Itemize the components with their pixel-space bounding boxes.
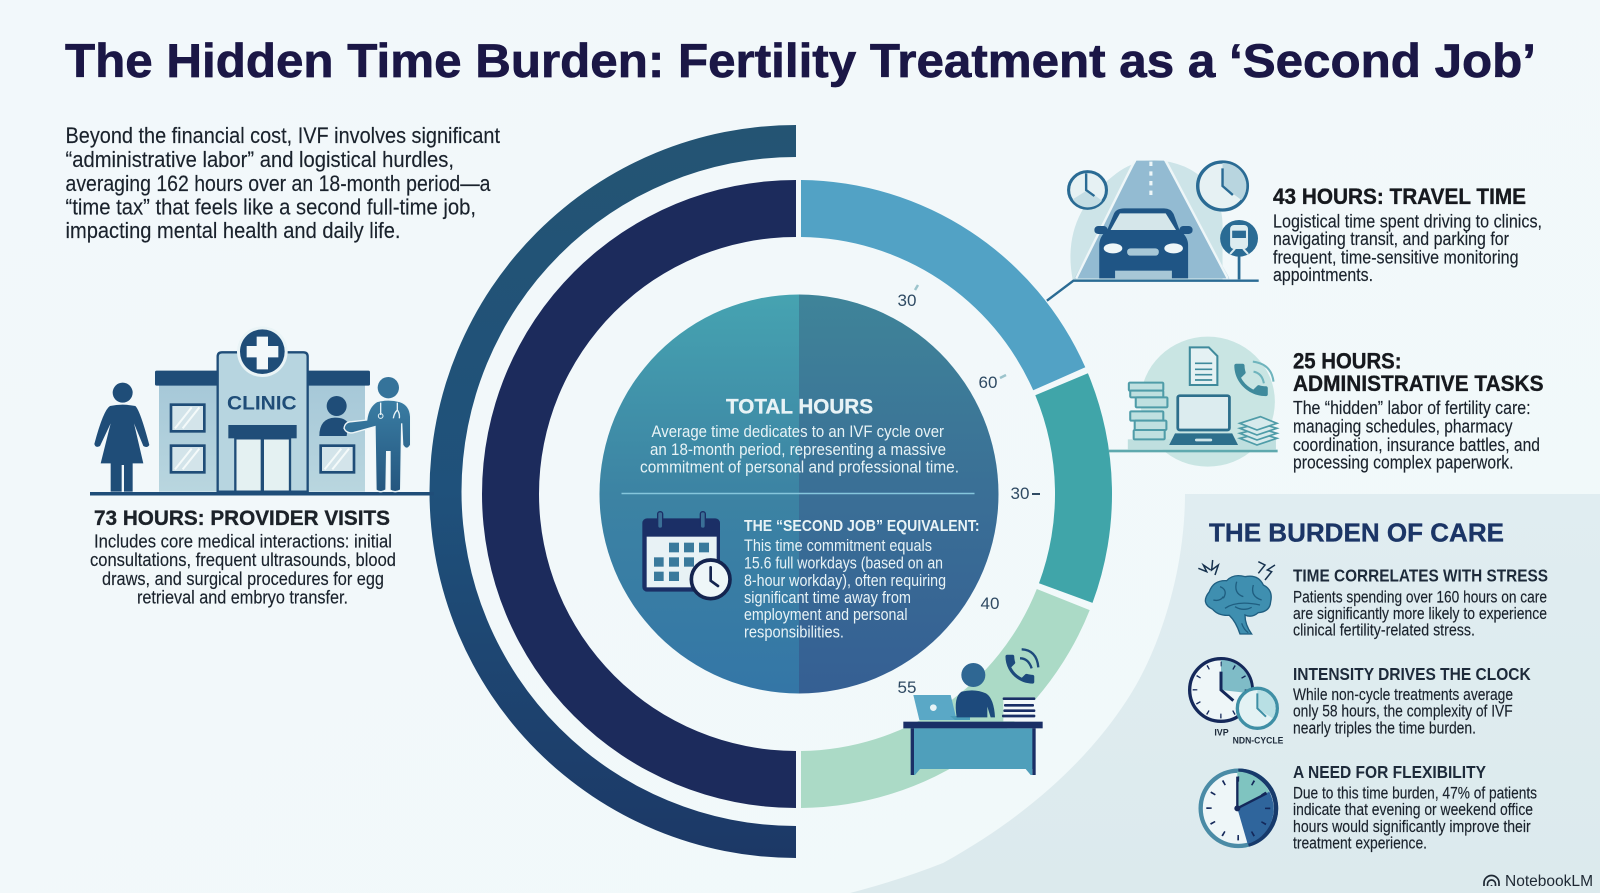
total hours text: Average time dedicates to an IVF cycle over xyxy=(652,422,944,441)
administrative tasks heading: 25 HOURS: xyxy=(1293,348,1402,374)
icon: road, car, clocks and train xyxy=(1047,160,1259,301)
administrative tasks heading: ADMINISTRATIVE TASKS xyxy=(1293,371,1544,396)
second job text xyxy=(744,536,946,642)
panel heading: the burden of care: THE BURDEN OF CARE xyxy=(1209,518,1504,548)
panel: the burden of care background xyxy=(850,494,1600,893)
logo: NotebookLM: NotebookLM xyxy=(1505,873,1593,890)
administrative tasks text xyxy=(1293,398,1540,472)
connector: travel xyxy=(1047,281,1259,301)
scale labels: 30 xyxy=(1011,484,1029,503)
provider visits text: consultations, frequent ultrasounds, blood xyxy=(90,550,396,570)
woman figure xyxy=(94,383,149,492)
travel time text: appointments. xyxy=(1273,265,1373,285)
travel time text: Logistical time spent driving to clinics, xyxy=(1273,212,1542,232)
second job text: This time commitment equals xyxy=(744,536,932,555)
total hours text: an 18-month period, representing a massive xyxy=(650,440,946,459)
provider visits heading: 73 HOURS: PROVIDER VISITS xyxy=(94,507,390,530)
icon: administrative desk items xyxy=(1109,337,1278,467)
icon: IVF and non-cycle clocks: NDN-CYCLE xyxy=(1233,735,1283,745)
provider visits text: draws, and surgical procedures for egg xyxy=(102,569,384,589)
heading: time correlates with stress: TIME CORRELATES WITH STRESS xyxy=(1293,566,1548,586)
heading: total hours: TOTAL HOURS xyxy=(726,396,873,418)
travel time text xyxy=(1273,212,1542,285)
flexibility text xyxy=(1293,784,1537,853)
heading: a need for flexibility: A NEED FOR FLEXIBILITY xyxy=(1293,762,1486,782)
scale labels: 30 xyxy=(898,291,916,310)
icon: calendar with clock xyxy=(642,512,730,599)
phone xyxy=(1234,364,1268,396)
total hours text: commitment of personal and professional time. xyxy=(640,458,959,476)
administrative tasks heading xyxy=(1293,348,1544,396)
clinic label: CLINIC xyxy=(227,393,297,414)
provider visits text xyxy=(90,532,396,608)
laptop xyxy=(1169,396,1238,445)
large clock xyxy=(1198,162,1247,210)
connector: admin xyxy=(1109,450,1278,452)
paper stack xyxy=(1240,417,1277,445)
intensity text: only 58 hours, the complexity of IVF xyxy=(1293,703,1513,721)
ring segment: travel time xyxy=(801,180,1085,390)
second job text: employment and personal xyxy=(744,605,908,624)
second job text: 8-hour workday), often requiring xyxy=(744,571,946,590)
title: The Hidden Time Burden: Fertility Treatment as a ‘Second Job’ xyxy=(65,35,1536,88)
small clock xyxy=(1069,172,1106,208)
icon: brain with stress marks xyxy=(1198,560,1275,634)
ring segment: provider visits xyxy=(482,180,796,808)
travel time text: frequent, time-sensitive monitoring xyxy=(1273,248,1518,268)
icon: IVF and non-cycle clocks xyxy=(1190,659,1283,745)
intensity text xyxy=(1293,686,1513,738)
doctor figure xyxy=(344,377,411,492)
center circle xyxy=(600,294,998,694)
train stop xyxy=(1220,220,1258,279)
second job text: 15.6 full workdays (based on an xyxy=(744,554,943,572)
icon: clinic with patient and doctor xyxy=(94,326,411,492)
travel time heading: 43 HOURS: TRAVEL TIME xyxy=(1273,184,1526,209)
connector: provider visits line xyxy=(90,492,434,495)
time correlates text xyxy=(1293,588,1547,640)
icon: person at desk xyxy=(903,649,1043,775)
provider visits text: Includes core medical interactions: initial xyxy=(94,532,392,552)
travel time text: navigating transit, and parking for xyxy=(1273,229,1509,249)
clock labels: IVP xyxy=(1214,728,1229,738)
scale labels: 60 xyxy=(979,373,997,392)
administrative tasks text: coordination, insurance battles, and xyxy=(1293,435,1540,455)
ring segment: other xyxy=(801,589,1090,808)
intro text block: impacting mental health and daily life. xyxy=(66,218,400,243)
icon: flexibility clock xyxy=(1201,771,1276,846)
icon: phone xyxy=(1005,655,1034,684)
intro text block: averaging 162 hours over an 18-month period—a xyxy=(66,171,491,196)
chart: radial time breakdown xyxy=(429,125,1112,858)
administrative tasks text: processing complex paperwork. xyxy=(1293,452,1514,472)
outer navy arc xyxy=(429,125,796,858)
time correlates text: Patients spending over 160 hours on care xyxy=(1293,588,1547,606)
document xyxy=(1190,347,1217,385)
second job text: responsibilities. xyxy=(744,622,844,642)
administrative tasks text: The “hidden” labor of fertility care: xyxy=(1293,398,1530,418)
administrative tasks text: managing schedules, pharmacy xyxy=(1293,416,1512,436)
flexibility text: Due to this time burden, 47% of patients xyxy=(1293,784,1537,802)
scale labels: 40 xyxy=(981,594,999,613)
intensity text: nearly triples the time burden. xyxy=(1293,720,1476,738)
scale labels xyxy=(898,285,1040,697)
flexibility text: hours would significantly improve their xyxy=(1293,818,1531,836)
heading: second job equivalent: THE “SECOND JOB” EQUIVALENT: xyxy=(744,518,980,535)
intensity text: While non-cycle treatments average xyxy=(1293,686,1513,704)
flexibility text: treatment experience. xyxy=(1293,835,1427,853)
intro text block: Beyond the financial cost, IVF involves significant xyxy=(66,123,500,148)
book stack xyxy=(1129,383,1167,439)
scale labels: 55 xyxy=(898,678,916,697)
flexibility text: indicate that evening or weekend office xyxy=(1293,801,1533,819)
provider visits text: retrieval and embryo transfer. xyxy=(137,588,348,608)
intro text block: “administrative labor” and logistical hurdles, xyxy=(66,147,454,172)
intro text block: “time tax” that feels like a second full-time job, xyxy=(66,194,476,220)
total hours text xyxy=(640,422,959,476)
intro text block xyxy=(66,123,500,243)
heading: intensity drives the clock: INTENSITY DRIVES THE CLOCK xyxy=(1293,664,1531,684)
second job text: significant time away from xyxy=(744,588,911,607)
ring segment: administrative tasks xyxy=(1035,373,1112,603)
time correlates text: clinical fertility-related stress. xyxy=(1293,622,1475,640)
time correlates text: are significantly more likely to experience xyxy=(1293,605,1547,623)
